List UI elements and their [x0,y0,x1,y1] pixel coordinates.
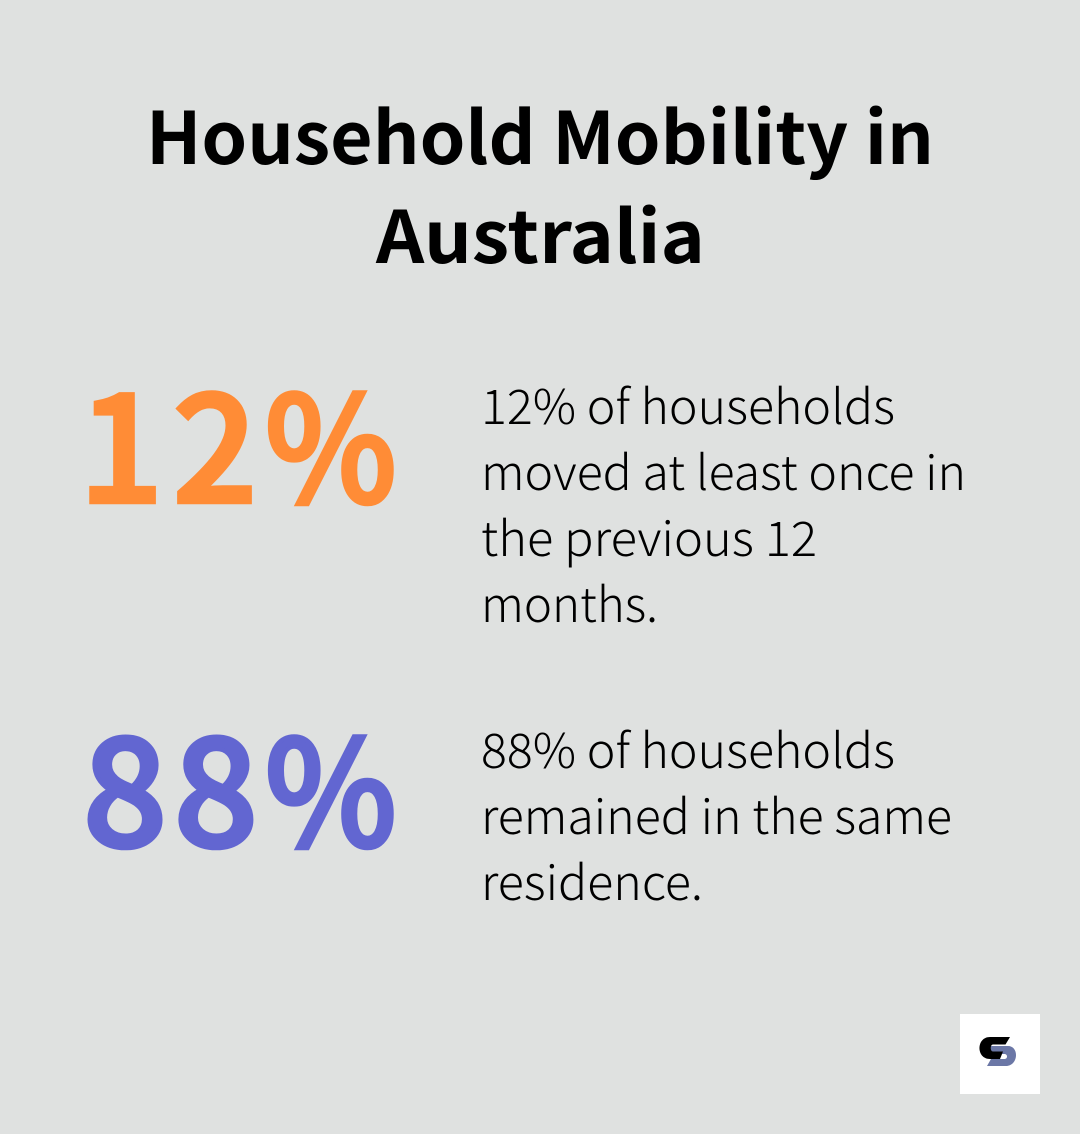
stat description: remained: remained in the same [481,778,952,848]
stat description: moved: 12% of households [481,368,895,438]
stat description: moved: months. [481,566,658,636]
title: Household Mobility in [146,80,934,185]
stat row: 12 percent [79,334,966,636]
stat value: 88%: % [265,678,397,889]
title: Australia [375,179,705,284]
stat value: 88% [83,678,397,889]
stat description: remained: residence. [481,844,703,914]
stat description: remained: 88% of households [481,712,895,782]
stat row: 88 percent [83,678,952,914]
stat description: moved: the previous 12 [481,500,817,570]
stat value: 12%: 12 [79,334,257,545]
stat description: remained [481,712,952,914]
stat value: 88%: 88 [83,678,258,889]
logo mark [980,1037,1016,1066]
logo badge [960,1014,1040,1094]
stat description: moved: moved at least once in [481,434,966,504]
stat value: 12%: % [265,334,397,545]
stat value: 12% [79,334,397,545]
title [146,80,934,284]
stat description: moved [481,368,966,636]
